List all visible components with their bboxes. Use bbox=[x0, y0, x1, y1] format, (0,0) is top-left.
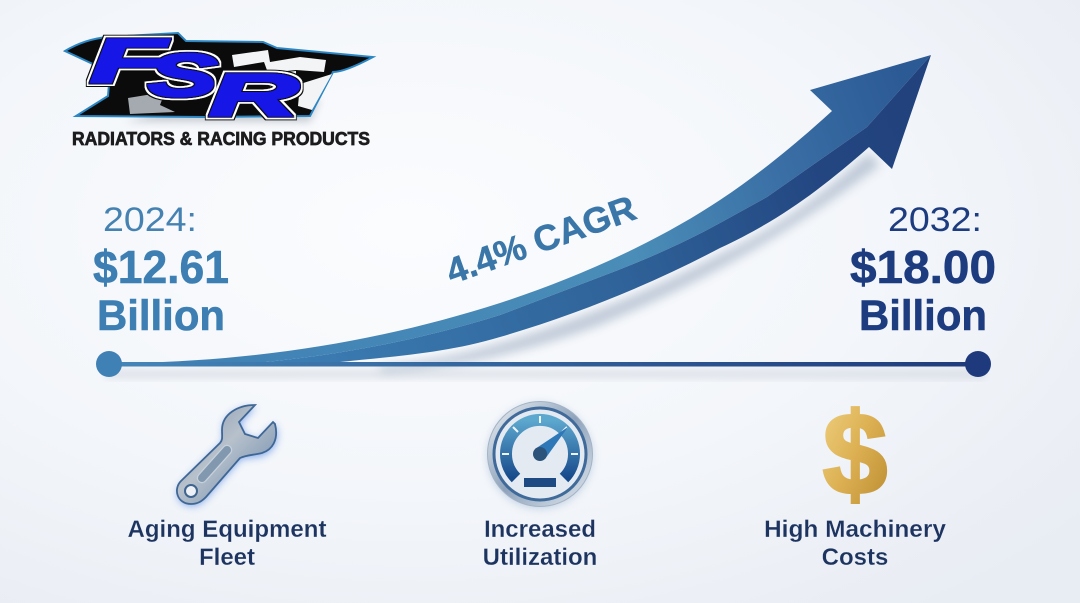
end value 2032 bbox=[850, 201, 996, 340]
driver label: increased utilization: Increased bbox=[484, 516, 596, 543]
arrow upper face bbox=[130, 55, 931, 366]
arrow lower face bbox=[230, 55, 931, 366]
icon: wrench bbox=[177, 405, 277, 506]
driver label: high machinery costs: High Machinery bbox=[764, 516, 947, 543]
logo letters FSR: F bbox=[90, 26, 168, 95]
logo swoosh with checkered flag bbox=[65, 33, 373, 122]
driver label: increased utilization bbox=[483, 516, 597, 571]
start marker bbox=[96, 351, 122, 377]
start value 2024: 2024: bbox=[103, 201, 197, 239]
end marker bbox=[965, 351, 991, 377]
driver label: aging equipment fleet bbox=[128, 516, 326, 571]
growth arrow bbox=[130, 55, 931, 372]
logo: FSR Radiators & Racing Products bbox=[65, 26, 373, 149]
end value 2032: 2032: bbox=[888, 201, 982, 239]
driver label: aging equipment fleet: Fleet bbox=[199, 544, 255, 571]
start value 2024 bbox=[93, 201, 229, 340]
icon: dollar sign: $ bbox=[823, 389, 887, 519]
icon: speedometer bbox=[487, 402, 593, 509]
logo letters FSR: R bbox=[209, 61, 299, 129]
logo letters FSR: S bbox=[148, 42, 217, 110]
start value 2024: Billion bbox=[97, 292, 225, 340]
driver label: high machinery costs bbox=[764, 516, 947, 571]
start value 2024: $12.61 bbox=[93, 241, 229, 293]
end value 2032: Billion bbox=[859, 292, 987, 340]
timeline axis bbox=[96, 351, 991, 379]
driver label: aging equipment fleet: Aging Equipment bbox=[128, 516, 326, 543]
logo letters FSR bbox=[90, 26, 299, 129]
growth rate label: 4.4% CAGR bbox=[441, 187, 641, 292]
driver label: high machinery costs: Costs bbox=[822, 544, 888, 571]
end value 2032: $18.00 bbox=[850, 241, 996, 293]
driver label: increased utilization: Utilization bbox=[483, 544, 597, 571]
logo tagline: RADIATORS & RACING PRODUCTS bbox=[72, 129, 370, 149]
